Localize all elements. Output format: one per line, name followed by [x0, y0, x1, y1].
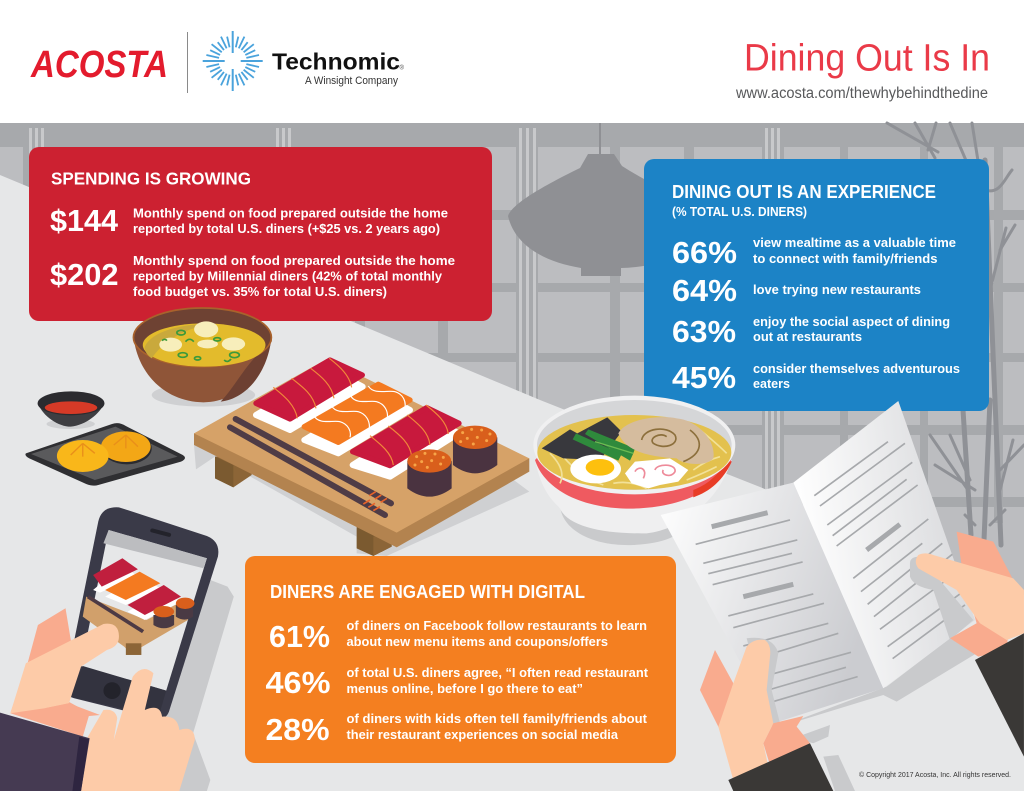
- text: 45% description: consider themselves adventurous: [753, 361, 960, 376]
- menu shadow: [780, 638, 977, 791]
- text: $202 description: reported by Millennial diners (42% of total monthly: [133, 268, 443, 284]
- stat: 66%: 66%: [672, 235, 737, 270]
- stat: 61%: 61%: [269, 619, 330, 654]
- text: $144 description: reported by total U.S. diners (+$25 vs. 2 years ago): [133, 221, 440, 236]
- text: 63% description: enjoy the social aspect of dining: [753, 314, 950, 329]
- soup bowl: [133, 308, 272, 407]
- text: 28% description: [346, 711, 648, 742]
- subheading: (% TOTAL U.S. DINERS): [672, 204, 807, 219]
- phone mini sushi image: [83, 558, 194, 655]
- text: 66% description: view mealtime as a valuable time: [753, 235, 956, 250]
- text: 45% description: [753, 361, 960, 391]
- title: Dining Out Is In: [744, 38, 990, 80]
- ikura rolls: [407, 426, 497, 497]
- text: 61% description: about new menu items and coupons/offers: [346, 634, 608, 649]
- sauce bowl: [38, 391, 104, 429]
- text: 63% description: out at restaurants: [753, 329, 862, 344]
- phone with camera view: [65, 507, 234, 791]
- text: 45% description: eaters: [753, 376, 790, 391]
- text: 63% description: [753, 314, 950, 344]
- text: 28% description: of diners with kids often tell family/friends about: [346, 711, 648, 726]
- stat: 64%: 64%: [672, 273, 737, 308]
- stat: $144: $144: [50, 203, 119, 238]
- panel: diners are engaged with digital: [245, 556, 676, 763]
- url: www.acosta.com/thewhybehindthedine: [735, 85, 988, 102]
- text: $202 description: food budget vs. 35% for total U.S. diners): [133, 284, 387, 299]
- logo: Technomic wordmark: ®: [400, 64, 404, 72]
- heading: DINING OUT IS AN EXPERIENCE: [672, 181, 936, 202]
- text: $144 description: Monthly spend on food prepared outside the home: [133, 206, 448, 220]
- text: 66% description: to connect with family/friends: [753, 251, 938, 266]
- text: 66% description: [753, 235, 956, 266]
- text: $202 description: Monthly spend on food prepared outside the home: [133, 253, 455, 268]
- text: 64% description: love trying new restaurants: [753, 282, 921, 297]
- panel: spending is growing: [29, 147, 492, 321]
- text: 28% description: their restaurant experiences on social media: [346, 727, 619, 742]
- logo: Technomic sunburst: [203, 31, 263, 91]
- sushi pieces: [256, 358, 459, 477]
- logo: Technomic wordmark: [272, 48, 404, 87]
- background: shoji wall: [0, 123, 1024, 623]
- stat: 63%: 63%: [672, 314, 736, 349]
- panel: dining out is an experience: [644, 159, 989, 411]
- background: table top: [0, 175, 1024, 791]
- copyright: © Copyright 2017 Acosta, Inc. All rights reserved.: [859, 770, 1011, 779]
- stat: 28%: 28%: [266, 712, 330, 747]
- logo: Technomic wordmark: A Winsight Company: [305, 75, 398, 87]
- logo: Technomic wordmark: Technomic: [272, 48, 400, 74]
- text: 46% description: of total U.S. diners agree, “I often read restaurant: [346, 665, 649, 680]
- sushi board: [194, 358, 529, 556]
- lantern lamp: [508, 123, 700, 276]
- stat: $202: $202: [50, 257, 118, 292]
- text: 61% description: [346, 618, 647, 649]
- chopsticks: [230, 419, 391, 515]
- ramen bowl: [533, 396, 735, 545]
- bamboo: [887, 123, 1024, 545]
- text: 46% description: menus online, before I go there to eat”: [346, 681, 583, 696]
- text: $202 description: [133, 253, 455, 299]
- open menu: [661, 401, 977, 791]
- stat: 45%: 45%: [672, 360, 736, 395]
- hand holding menu left: [700, 638, 833, 791]
- heading: SPENDING IS GROWING: [51, 168, 251, 188]
- hand holding menu right: [910, 532, 1024, 757]
- heading: DINERS ARE ENGAGED WITH DIGITAL: [270, 581, 585, 602]
- text: 46% description: [346, 665, 649, 696]
- hand holding phone: [0, 608, 195, 791]
- logo: Acosta: ACOSTA: [30, 44, 168, 86]
- text: $144 description: [133, 206, 448, 236]
- dumpling plate: [25, 423, 185, 486]
- stat: 46%: 46%: [266, 665, 330, 700]
- text: 61% description: of diners on Facebook follow restaurants to learn: [346, 618, 647, 633]
- header background: [0, 0, 1024, 123]
